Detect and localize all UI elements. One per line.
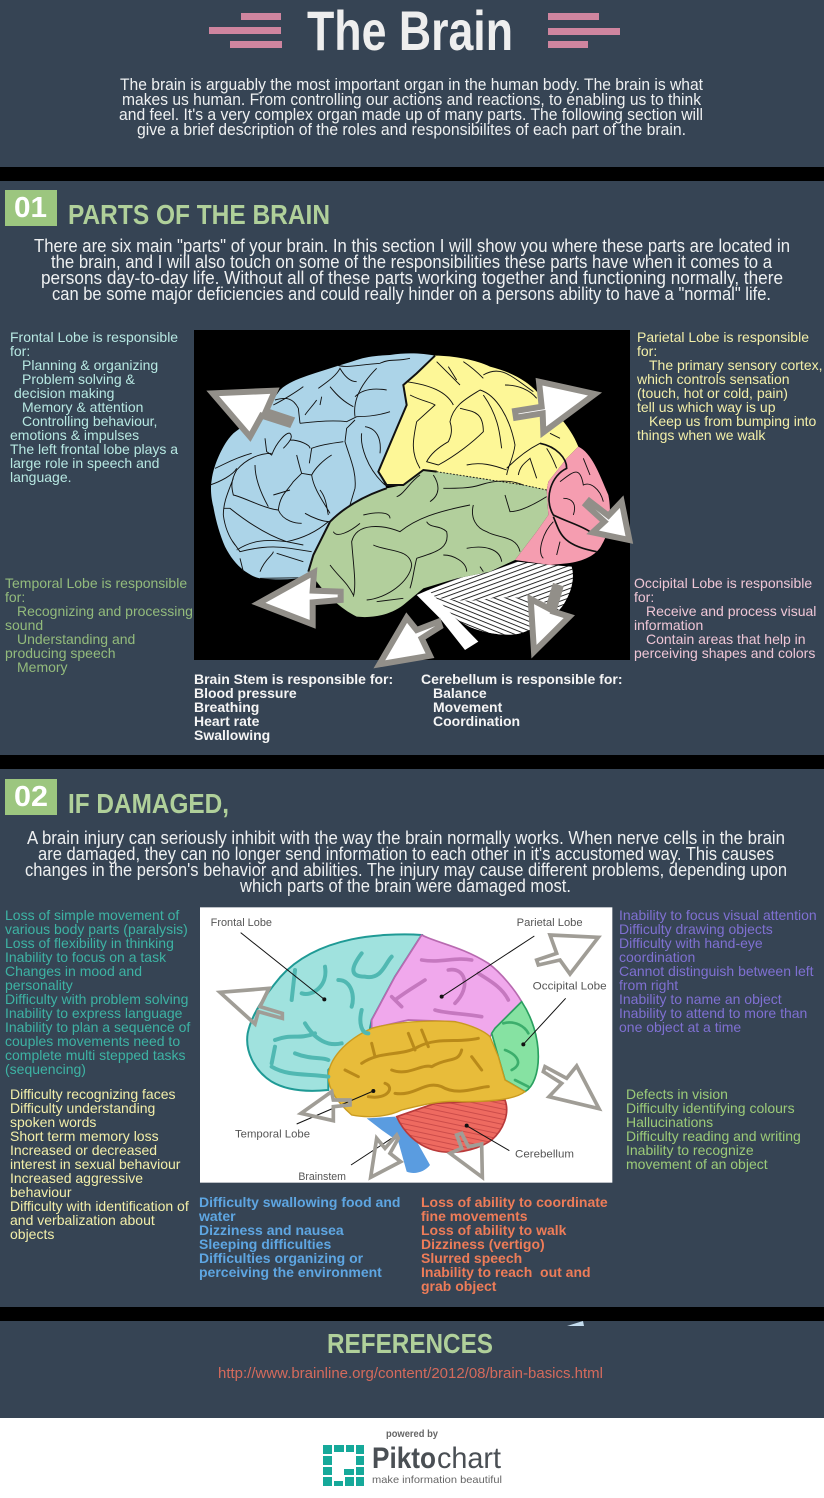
references bbox=[218, 1328, 603, 1382]
arrow: to brain stem bbox=[379, 618, 440, 664]
labels and pointer lines: Frontal Lobe bbox=[211, 917, 272, 929]
intro paragraph: and feel. It's a very complex organ made up of many parts. The following section will bbox=[119, 105, 703, 124]
text: frontal lobe damage: Inability to focus on a task bbox=[5, 949, 167, 965]
text: occipital lobe damage: movement of an object bbox=[626, 1156, 768, 1172]
text: brainstem damage: Difficulty swallowing food and bbox=[199, 1194, 400, 1210]
text: parietal lobe damage: Inability to name an object bbox=[619, 991, 782, 1007]
text: frontal lobe damage: (sequencing) bbox=[5, 1061, 86, 1077]
text: brainstem damage: perceiving the environment bbox=[199, 1264, 382, 1280]
section 01 paragraph bbox=[34, 235, 790, 304]
icon: right pink bars bbox=[548, 13, 620, 48]
part: brainstem bbox=[367, 1117, 430, 1173]
intro paragraph: The brain is arguably the most important organ in the human body. The brain is what bbox=[120, 75, 703, 94]
text: frontal lobe damage: Loss of flexibility in thinking bbox=[5, 935, 174, 951]
labels and pointer lines: Temporal Lobe bbox=[235, 1128, 310, 1140]
badge 02 bbox=[5, 779, 57, 815]
intro paragraph: makes us human. From controlling our actions and reactions, to enabling us to think bbox=[122, 90, 701, 109]
text: frontal lobe responsibilities: for: bbox=[10, 343, 30, 359]
text: occipital lobe responsibilities: information bbox=[634, 617, 703, 633]
text: cerebellum damage: grab object bbox=[421, 1278, 497, 1294]
text: frontal lobe responsibilities: emotions & impulses bbox=[10, 427, 139, 443]
text: cerebellum damage: Inability to reach out and bbox=[421, 1264, 591, 1280]
piktochart wordmark: Pikto bbox=[372, 1442, 436, 1475]
section 01 paragraph: persons day-to-day life. Without all of these parts working together and functioning normally, there bbox=[41, 267, 783, 288]
text: parietal lobe damage: coordination bbox=[619, 949, 695, 965]
text: frontal lobe responsibilities: Frontal Lobe is responsible bbox=[10, 329, 178, 345]
text: temporal lobe damage: objects bbox=[10, 1226, 54, 1242]
text: temporal lobe responsibilities: sound bbox=[5, 617, 43, 633]
text: parietal lobe damage: Inability to attend to more than bbox=[619, 1005, 807, 1021]
part: cerebellum bbox=[397, 1100, 507, 1152]
text: temporal lobe responsibilities: Understanding and bbox=[17, 631, 135, 647]
text: frontal lobe damage: various body parts (paralysis) bbox=[5, 921, 188, 937]
shading: gyri bbox=[272, 953, 528, 1097]
text: temporal lobe damage: Increased aggressive bbox=[10, 1170, 143, 1186]
text: cerebellum damage: fine movements bbox=[421, 1208, 528, 1224]
part: frontal lobe bbox=[247, 934, 422, 1091]
part: occipital lobe bbox=[492, 1002, 538, 1092]
heading text: IF DAMAGED, bbox=[68, 788, 229, 819]
text: brain stem responsibilities: Brain Stem is responsible for: bbox=[194, 671, 393, 687]
text: frontal lobe damage: Changes in mood and bbox=[5, 963, 142, 979]
text: temporal lobe damage: and verbalization about bbox=[10, 1212, 155, 1228]
arrow: to cerebellum bbox=[531, 587, 569, 652]
intro paragraph bbox=[119, 75, 703, 139]
text: temporal lobe responsibilities: Memory bbox=[17, 659, 68, 675]
icon: piktochart logo bbox=[323, 1445, 364, 1486]
text: temporal lobe responsibilities: Temporal Lobe is responsible bbox=[5, 575, 187, 591]
lobe: parietal bbox=[378, 356, 578, 490]
text: frontal lobe responsibilities: decision making bbox=[14, 385, 114, 401]
part: parietal lobe bbox=[372, 935, 522, 1037]
badge 01: 01 bbox=[14, 192, 47, 224]
text: parietal lobe responsibilities: which controls sensation bbox=[636, 371, 790, 387]
references heading: REFERENCES bbox=[327, 1328, 493, 1359]
text: temporal lobe damage: spoken words bbox=[10, 1114, 96, 1130]
section 02 paragraph: which parts of the brain were damaged most. bbox=[239, 875, 571, 896]
text: parietal lobe damage: from right bbox=[619, 977, 678, 993]
outline arrows bbox=[220, 935, 599, 1177]
text: cerebellum damage: Loss of ability to coordinate bbox=[421, 1194, 608, 1210]
text: cerebellum responsibilities: Balance bbox=[433, 685, 487, 701]
text: temporal lobe damage: Difficulty with identification of bbox=[10, 1198, 189, 1214]
text: occipital lobe damage: Defects in vision bbox=[626, 1086, 728, 1102]
text: temporal lobe responsibilities: for: bbox=[5, 589, 25, 605]
text: cerebellum responsibilities: Movement bbox=[433, 699, 503, 715]
reference url: http://www.brainline.org/content/2012/08/brain-basics.html bbox=[218, 1366, 603, 1382]
text: temporal lobe damage: behaviour bbox=[10, 1184, 72, 1200]
text: frontal lobe responsibilities: Planning & organizing bbox=[22, 357, 158, 373]
text: frontal lobe responsibilities: The left frontal lobe plays a bbox=[10, 441, 178, 457]
text: temporal lobe damage: Short term memory loss bbox=[10, 1128, 159, 1144]
labels and pointer lines: Brainstem bbox=[298, 1171, 346, 1183]
title bbox=[209, 0, 620, 62]
lobe: occipital bbox=[515, 447, 610, 565]
badge 01 bbox=[5, 190, 57, 226]
text: frontal lobe responsibilities: Controlling behaviour, bbox=[22, 413, 157, 429]
labels and pointer lines: Parietal Lobe bbox=[517, 917, 583, 929]
text: occipital lobe responsibilities: Contain areas that help in bbox=[646, 631, 806, 647]
text: frontal lobe damage: Difficulty with problem solving bbox=[5, 991, 188, 1007]
piktochart wordmark: chart bbox=[437, 1442, 502, 1475]
text: temporal lobe damage: Difficulty recognizing faces bbox=[10, 1086, 175, 1102]
icon: left pink bars bbox=[209, 13, 282, 48]
sliver of arrow at band edge bbox=[567, 1321, 584, 1326]
text: parietal lobe responsibilities: Keep us from bumping into bbox=[649, 413, 817, 429]
footer bbox=[0, 1418, 824, 1498]
text: occipital lobe damage: Difficulty reading and writing bbox=[626, 1128, 801, 1144]
text: occipital lobe responsibilities: perceiving shapes and colors bbox=[634, 645, 815, 661]
arrow: to frontal lobe bbox=[213, 391, 291, 437]
heading text: PARTS OF THE BRAIN bbox=[68, 199, 330, 230]
lobe: cerebellum bbox=[417, 562, 573, 650]
sulci lines bbox=[210, 356, 603, 602]
text: parietal lobe responsibilities: (touch, hot or cold, pain) bbox=[637, 385, 788, 401]
labels and pointer lines: Occipital Lobe bbox=[533, 980, 607, 992]
text: frontal lobe damage: personality bbox=[5, 977, 73, 993]
text: parietal lobe damage: one object at a time bbox=[619, 1019, 741, 1035]
text: frontal lobe damage: Loss of simple movement of bbox=[5, 907, 179, 923]
piktochart wordmark bbox=[372, 1442, 502, 1486]
text: brain stem responsibilities: Blood pressure bbox=[194, 685, 297, 701]
text: parietal lobe damage: Difficulty drawing objects bbox=[619, 921, 773, 937]
text: parietal lobe responsibilities: Parietal Lobe is responsible bbox=[637, 329, 809, 345]
text: temporal lobe damage: interest in sexual behaviour bbox=[10, 1156, 181, 1172]
labels and pointer lines: Cerebellum bbox=[515, 1149, 574, 1161]
lobe: temporal bbox=[308, 470, 548, 617]
text: frontal lobe responsibilities: Memory & attention bbox=[22, 399, 143, 415]
labels and pointer lines bbox=[211, 917, 607, 1183]
text: parietal lobe responsibilities: tell us which way is up bbox=[637, 399, 776, 415]
text: cerebellum responsibilities: Coordination bbox=[433, 713, 520, 729]
text: occipital lobe responsibilities: Occipital Lobe is responsible bbox=[634, 575, 812, 591]
badge 02: 02 bbox=[14, 781, 48, 813]
text: cerebellum damage: Slurred speech bbox=[421, 1250, 522, 1266]
text: frontal lobe responsibilities: language. bbox=[10, 469, 72, 485]
piktochart wordmark: make information beautiful bbox=[372, 1474, 502, 1486]
arrow: to temporal lobe bbox=[258, 572, 341, 624]
text: parietal lobe damage: Cannot distinguish between left bbox=[619, 963, 814, 979]
text: brain stem responsibilities: Heart rate bbox=[194, 713, 260, 729]
text: temporal lobe responsibilities: producing speech bbox=[5, 645, 116, 661]
text: temporal lobe damage: Difficulty understanding bbox=[10, 1100, 155, 1116]
section 01 heading bbox=[5, 190, 330, 230]
text: temporal lobe damage: Increased or decreased bbox=[10, 1142, 157, 1158]
text: brainstem damage: Sleeping difficulties bbox=[199, 1236, 331, 1252]
title text: The Brain bbox=[307, 0, 513, 62]
text: occipital lobe responsibilities: Receive and process visual bbox=[646, 603, 816, 619]
text: frontal lobe damage: Inability to express language bbox=[5, 1005, 183, 1021]
text: occipital lobe damage: Difficulty identifying colours bbox=[626, 1100, 795, 1116]
text: frontal lobe damage: Inability to plan a sequence of bbox=[5, 1019, 190, 1035]
text: parietal lobe damage: Inability to focus visual attention bbox=[619, 907, 817, 923]
lobe: frontal bbox=[211, 353, 435, 579]
diagram: labelled brain illustration bbox=[200, 907, 612, 1183]
text: frontal lobe damage: complete multi stepped tasks bbox=[5, 1047, 186, 1063]
text: frontal lobe responsibilities: large role in speech and bbox=[10, 455, 159, 471]
diagram: colored brain lobes on black bbox=[194, 330, 634, 668]
section 02 paragraph bbox=[25, 827, 787, 896]
text: parietal lobe responsibilities: The primary sensory cortex, bbox=[649, 357, 822, 373]
text: brainstem damage: Dizziness and nausea bbox=[199, 1222, 344, 1238]
arrow: to occipital lobe bbox=[586, 501, 629, 540]
text: brain stem responsibilities: Breathing bbox=[194, 699, 259, 715]
section 02 heading bbox=[5, 779, 229, 819]
text: cerebellum damage: Loss of ability to walk bbox=[421, 1222, 567, 1238]
text: occipital lobe damage: Hallucinations bbox=[626, 1114, 713, 1130]
text: brain stem responsibilities: Swallowing bbox=[194, 727, 270, 743]
arrow: to parietal lobe bbox=[515, 382, 595, 432]
text: brainstem damage: water bbox=[198, 1208, 236, 1224]
text: brainstem damage: Difficulties organizing or bbox=[199, 1250, 364, 1266]
text: frontal lobe damage: couples movements need to bbox=[5, 1033, 180, 1049]
text: parietal lobe damage: Difficulty with hand-eye bbox=[619, 935, 763, 951]
text: cerebellum responsibilities: Cerebellum is responsible for: bbox=[421, 671, 622, 687]
powered by: powered by bbox=[386, 1429, 438, 1440]
text: cerebellum damage: Dizziness (vertigo) bbox=[421, 1236, 545, 1252]
text: occipital lobe responsibilities: for: bbox=[634, 589, 654, 605]
part: temporal lobe bbox=[328, 1021, 525, 1117]
text: occipital lobe damage: Inability to recognize bbox=[626, 1142, 754, 1158]
text: frontal lobe responsibilities: Problem solving & bbox=[22, 371, 135, 387]
text: parietal lobe responsibilities: things when we walk bbox=[637, 427, 766, 443]
intro paragraph: give a brief description of the roles and responsibilites of each part of the brain. bbox=[137, 120, 686, 139]
header band bbox=[0, 0, 824, 167]
text: temporal lobe responsibilities: Recognizing and processing bbox=[17, 603, 193, 619]
text: parietal lobe responsibilities: for: bbox=[637, 343, 657, 359]
